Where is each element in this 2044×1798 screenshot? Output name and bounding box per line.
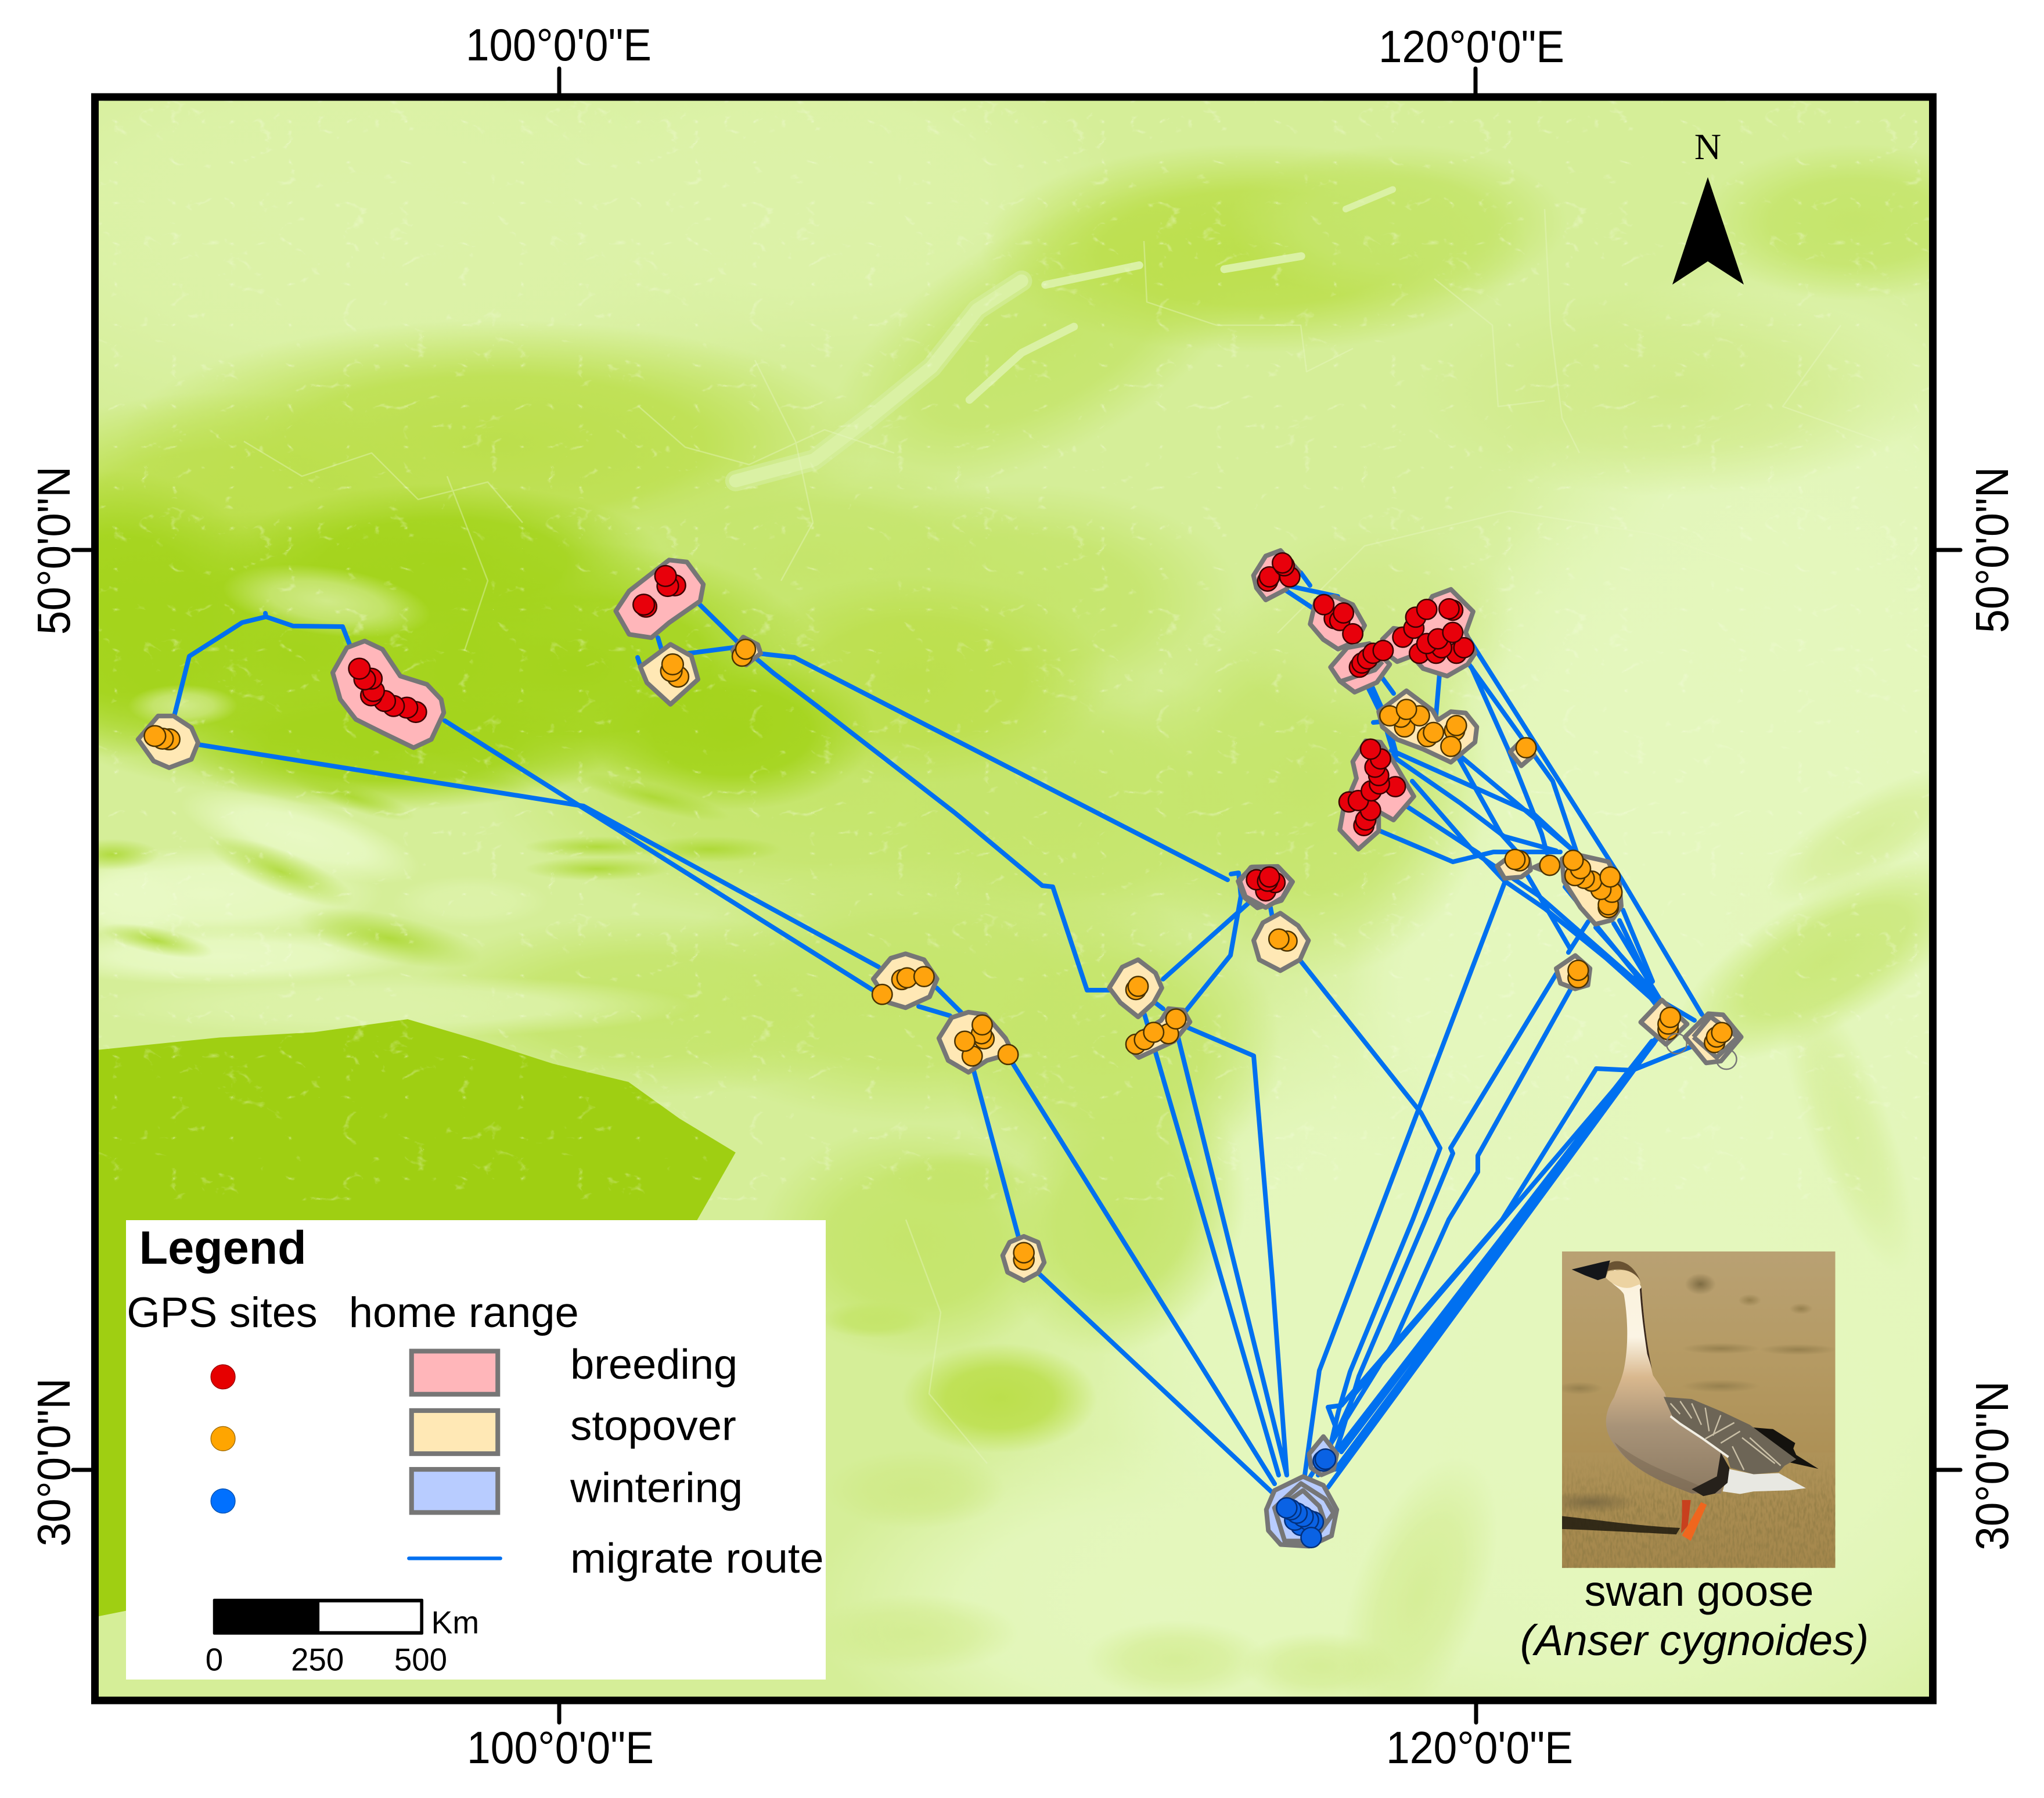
home range sites: south-east group <box>1556 955 1741 1069</box>
stopover legend row <box>211 1403 736 1454</box>
breeding C <box>1330 641 1393 692</box>
stopover T3 <box>1109 960 1162 1017</box>
neck and body <box>1606 1270 1729 1494</box>
scale bar: 250 <box>291 1642 344 1678</box>
stopover T2 <box>939 1012 1018 1072</box>
longitude labels top: 120°0'0"E <box>1379 21 1564 72</box>
longitude labels bottom: 100°0'0"E <box>467 1722 654 1773</box>
legend title: Legend <box>139 1222 307 1274</box>
Tibetan plateau dark area <box>78 1019 736 1620</box>
wintering W2 <box>1309 1437 1337 1475</box>
home range sites: far west group <box>138 560 703 768</box>
latitude labels left <box>28 466 80 1547</box>
legend panel <box>126 1220 826 1680</box>
latitude labels left: 50°0'0"N <box>28 466 80 635</box>
neck dark stripe <box>1640 1288 1652 1369</box>
north arrow <box>1672 126 1744 285</box>
body shading <box>1614 1442 1707 1494</box>
mid elevation bands <box>0 120 2012 1395</box>
home range sites: wintering group <box>1003 1236 1337 1548</box>
latitude labels left: 30°0'0"N <box>28 1378 80 1547</box>
column headings <box>127 1289 579 1336</box>
light desert patches <box>26 553 692 1037</box>
stopover T7 <box>1003 1236 1044 1281</box>
breeding B <box>1310 595 1365 649</box>
column headings: GPS sites <box>127 1289 318 1336</box>
wing stripes <box>1671 1401 1781 1470</box>
stopover U3 <box>1685 1013 1741 1069</box>
stopover U2 <box>1640 1000 1687 1053</box>
stopover legend row: stopover <box>570 1403 736 1449</box>
breeding site west <box>333 641 444 747</box>
dark belly <box>1692 1453 1729 1496</box>
wintering W1 <box>1266 1477 1337 1548</box>
terrain veins texture <box>95 97 1933 1200</box>
home range sites: central group <box>872 866 1308 1072</box>
stopover L <box>1562 850 1622 924</box>
white rump <box>1723 1469 1806 1494</box>
scale bar: 0 <box>206 1642 223 1678</box>
latitude labels right: 50°0'0"N <box>1966 467 2018 633</box>
tail feathers <box>1747 1427 1819 1469</box>
longitude labels bottom <box>467 1722 1573 1773</box>
north arrow: N <box>1694 126 1721 167</box>
species caption <box>1520 1567 1869 1664</box>
Baikal lake and valleys <box>736 189 1392 481</box>
stopover T1 <box>872 954 937 1008</box>
breeding site north <box>616 560 703 638</box>
stopover G <box>1510 738 1536 766</box>
column headings: home range <box>349 1289 579 1336</box>
latitude labels right: 30°0'0"N <box>1966 1381 2018 1551</box>
stopover K <box>1534 855 1560 875</box>
breeding D <box>1383 589 1475 676</box>
scale bar: 500 <box>394 1642 447 1678</box>
stopover site west <box>138 716 198 768</box>
migration routes <box>174 573 1702 1493</box>
head <box>1606 1270 1640 1288</box>
wing <box>1664 1397 1796 1474</box>
wintering legend row <box>211 1465 743 1513</box>
breeding A <box>1254 551 1300 600</box>
stopover E <box>1379 691 1477 762</box>
wintering legend row: wintering <box>570 1465 743 1511</box>
dark high elevation zones <box>99 480 865 808</box>
dark streaks <box>65 738 2006 1752</box>
home range sites: north-east group <box>1240 551 1622 924</box>
species caption: (Anser cygnoides) <box>1520 1616 1869 1664</box>
longitude labels top: 100°0'0"E <box>466 19 652 70</box>
swan goose photo <box>1545 1252 1837 1568</box>
stopover U1 <box>1556 955 1590 989</box>
terrain rivers <box>244 209 1881 1463</box>
stopover T4 <box>1126 1009 1190 1058</box>
small stopover site north <box>732 637 761 666</box>
scale bar: Km <box>431 1605 479 1641</box>
species caption: swan goose <box>1585 1567 1813 1615</box>
longitude labels bottom: 120°0'0"E <box>1386 1722 1573 1773</box>
longitude labels top <box>466 19 1564 72</box>
stopover site north <box>640 645 698 704</box>
breeding T5 <box>1238 866 1293 908</box>
breeding H <box>1240 867 1291 908</box>
migrate route legend row: migrate route <box>570 1536 824 1582</box>
breeding legend row: breeding <box>570 1342 737 1388</box>
legs <box>1681 1500 1691 1533</box>
bill <box>1572 1260 1610 1280</box>
grass texture <box>1562 1453 1836 1568</box>
stopover J <box>1497 850 1531 878</box>
light lowland areas <box>99 101 1929 1697</box>
latitude labels right <box>1966 467 2018 1551</box>
scale bar <box>206 1599 479 1678</box>
white wing line <box>1671 1416 1729 1457</box>
breeding legend row <box>211 1342 737 1394</box>
terrain background map <box>99 101 1929 1697</box>
stopover T6 <box>1254 913 1308 970</box>
breeding F <box>1339 739 1414 849</box>
